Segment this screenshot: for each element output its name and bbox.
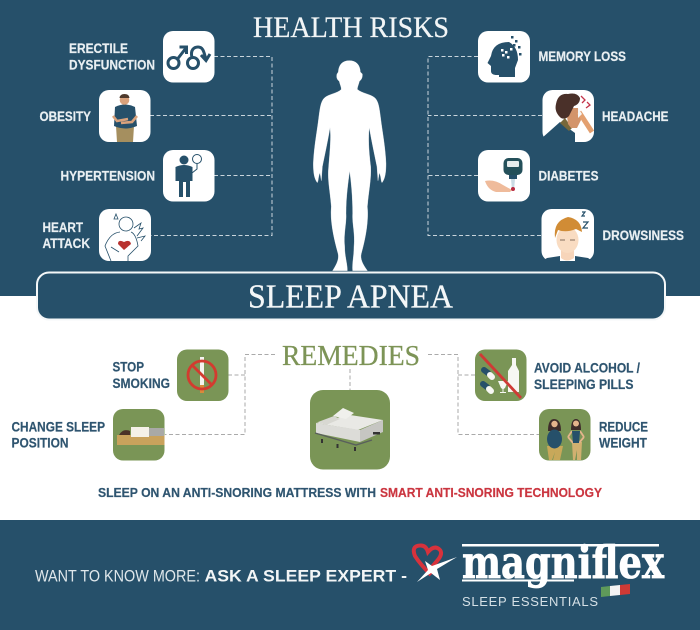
- risk: erectile dysfunction: [69, 31, 214, 82]
- remedy: change sleep position: CHANGE SLEEP: [12, 420, 105, 434]
- connector: mattress: [349, 369, 351, 390]
- caption: anti-snoring mattress: SLEEP ON AN ANTI-SNORING MATTRESS WITH: [98, 486, 376, 500]
- remedy: stop smoking: STOP: [112, 360, 144, 374]
- risk: obesity: [40, 90, 150, 142]
- remedy: avoid alcohol and sleeping pills: [475, 350, 640, 401]
- remedy: stop smoking: SMOKING: [112, 376, 170, 391]
- connectors: right remedies: [428, 354, 539, 434]
- risk: diabetes: DIABETES: [538, 168, 598, 184]
- logo: magniflex sleep essentials: [462, 536, 665, 609]
- risk: drowsiness: [541, 209, 684, 262]
- panel: footer background: [0, 520, 700, 630]
- risk: hypertension: [60, 150, 214, 202]
- remedy: change sleep position: [12, 409, 164, 460]
- remedy: avoid alcohol and sleeping pills: SLEEPING PILLS: [534, 377, 634, 392]
- risk: drowsiness: DROWSINESS: [602, 228, 684, 243]
- caption: anti-snoring mattress: SMART ANTI-SNORING TECHNOLOGY: [380, 486, 603, 500]
- call to action: [35, 566, 407, 586]
- risk: memory loss: MEMORY LOSS: [538, 49, 626, 64]
- risk: obesity: OBESITY: [40, 109, 91, 124]
- call to action: ASK A SLEEP EXPERT -: [204, 566, 407, 586]
- remedy: reduce weight: WEIGHT: [599, 436, 648, 450]
- banner: sleep apnea: SLEEP APNEA: [248, 278, 453, 316]
- panel: health risks background: [0, 0, 700, 296]
- remedy: reduce weight: REDUCE: [599, 420, 648, 434]
- heading: remedies: REMEDIES: [282, 341, 420, 372]
- remedy: change sleep position: POSITION: [12, 436, 68, 450]
- banner: sleep apnea: [37, 272, 665, 320]
- icon: heart and star logo mark: [414, 545, 457, 582]
- risk: erectile dysfunction: ERECTILE: [69, 41, 128, 56]
- logo: magniflex sleep essentials: SLEEP ESSENTIALS: [462, 594, 598, 609]
- risk: heart attack: ATTACK: [42, 236, 90, 251]
- risk: headache: HEADACHE: [602, 109, 668, 124]
- remedy: reduce weight: [539, 409, 648, 460]
- risk: diabetes: [478, 150, 598, 202]
- human body silhouette: [313, 61, 386, 271]
- remedy: stop smoking: [112, 350, 228, 401]
- risk: hypertension: HYPERTENSION: [60, 168, 155, 184]
- call to action: WANT TO KNOW MORE:: [35, 568, 200, 586]
- title: health risks: HEALTH RISKS: [253, 11, 449, 44]
- caption: anti-snoring mattress: [98, 486, 603, 500]
- connectors: left health risks: [150, 56, 272, 236]
- connectors: right health risks: [428, 56, 542, 236]
- connectors: left remedies: [165, 354, 275, 434]
- risk: headache: [542, 90, 668, 142]
- remedy: avoid alcohol and sleeping pills: AVOID ALCOHOL /: [534, 360, 640, 376]
- risk: erectile dysfunction: DYSFUNCTION: [69, 58, 155, 72]
- remedy: mattress: [310, 390, 390, 470]
- risk: heart attack: HEART: [42, 220, 84, 235]
- risk: memory loss: [478, 31, 626, 82]
- risk: heart attack: [42, 209, 151, 261]
